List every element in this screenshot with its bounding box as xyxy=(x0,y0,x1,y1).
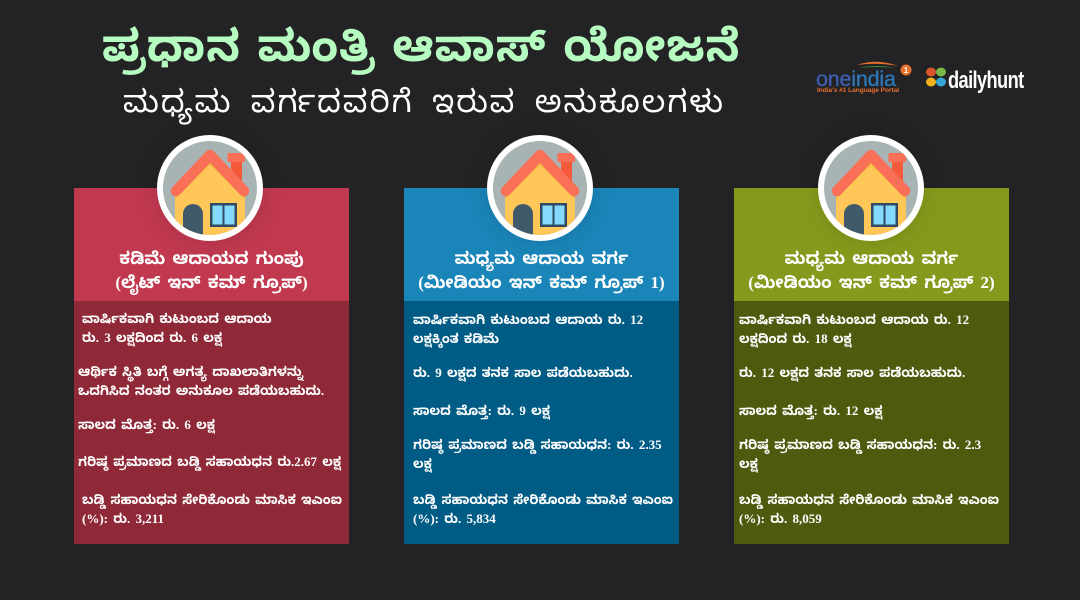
item: annual income xyxy=(413,312,643,348)
panel: middle income group 1 xyxy=(404,188,679,544)
heading: mig 1 xyxy=(418,249,665,294)
icon: house 3 xyxy=(818,135,924,242)
heading: mig 2: ಮಧ್ಯಮ ಆದಾಯ ವರ್ಗ xyxy=(785,249,958,268)
item: subsidy: ಗರಿಷ್ಠ ಪ್ರಮಾಣದ ಬಡ್ಡಿ ಸಹಾಯಧನ ರು.2.67 ಲಕ್ಷ xyxy=(78,454,341,469)
item: annual income: ವಾರ್ಷಿಕವಾಗಿ ಕುಟುಂಬದ ಆದಾಯ ರು. 12 xyxy=(413,312,643,327)
title: ಪ್ರಧಾನ ಮಂತ್ರಿ ಆವಾಸ್ ಯೋಜನೆ xyxy=(102,22,741,71)
item: monthly emi: ಬಡ್ಡಿ ಸಹಾಯಧನ ಸೇರಿಕೊಂಡು ಮಾಸಿಕ ಇಎಂಐ xyxy=(739,492,999,507)
heading: low income group xyxy=(115,249,308,295)
item: annual income: ಲಕ್ಷಕ್ಕಿಂತ ಕಡಿಮೆ xyxy=(413,331,499,346)
logo: oneindia: India's #1 Language Portal xyxy=(817,87,899,94)
item: annual income: ಲಕ್ಷದಿಂದ ರು. 18 ಲಕ್ಷ xyxy=(739,331,852,346)
logo: oneindia: 1 xyxy=(904,66,909,75)
item: monthly emi: (%): ರು. 3,211 xyxy=(82,511,164,526)
item: annual income xyxy=(82,311,272,347)
logo: oneindia: oneindia xyxy=(816,67,896,91)
panel body: low income xyxy=(74,301,349,544)
item: monthly emi: (%): ರು. 8,059 xyxy=(739,511,822,526)
item: loan amount: ಸಾಲದ ಮೊತ್ತ: ರು. 6 ಲಕ್ಷ xyxy=(78,417,215,432)
item: loan limit: ರು. 12 ಲಕ್ಷದ ತನಕ ಸಾಲ ಪಡೆಯಬಹುದು. xyxy=(739,365,965,380)
item: subsidy: ಗರಿಷ್ಠ ಪ್ರಮಾಣದ ಬಡ್ಡಿ ಸಹಾಯಧನ: ರು. 2.35 xyxy=(413,437,662,452)
item: subsidy: ಲಕ್ಷ xyxy=(413,456,432,471)
item: subsidy: ಲಕ್ಷ xyxy=(739,456,758,471)
panel header: mig 1 xyxy=(404,188,679,301)
panel body: mig 2 xyxy=(734,301,1009,544)
item: loan amount: ಸಾಲದ ಮೊತ್ತ: ರು. 9 ಲಕ್ಷ xyxy=(413,403,550,418)
panel header: low income xyxy=(74,188,349,301)
panel header: mig 2 xyxy=(734,188,1009,301)
heading: low income group: ಕಡಿಮೆ ಆದಾಯದ ಗುಂಪು xyxy=(119,249,304,268)
heading: mig 2: (ಮೀಡಿಯಂ ಇನ್ ಕಮ್ ಗ್ರೂಪ್ 2) xyxy=(748,273,995,292)
item: subsidy: ಗರಿಷ್ಠ ಪ್ರಮಾಣದ ಬಡ್ಡಿ ಸಹಾಯಧನ: ರು. 2.3 xyxy=(739,437,981,452)
item: monthly emi: (%): ರು. 5,834 xyxy=(413,511,496,526)
item: monthly emi xyxy=(82,492,342,526)
subtitle: ಮಧ್ಯಮ ವರ್ಗದವರಿಗೆ ಇರುವ ಅನುಕೂಲಗಳು xyxy=(123,84,725,119)
item: documents: ಆರ್ಥಿಕ ಸ್ಥಿತಿ ಬಗ್ಗೆ ಅಗತ್ಯ ದಾಖಲಾತಿಗಳನ್ನು xyxy=(78,364,303,379)
icon: house 1 xyxy=(154,135,266,244)
item: documents: ಒದಗಿಸಿದ ನಂತರ ಅನುಕೂಲ ಪಡೆಯಬಹುದು. xyxy=(78,383,324,398)
item: monthly emi: ಬಡ್ಡಿ ಸಹಾಯಧನ ಸೇರಿಕೊಂಡು ಮಾಸಿಕ ಇಎಂಐ xyxy=(413,492,673,507)
logo: dailyhunt: dailyhunt xyxy=(948,67,1024,94)
item: annual income: ವಾರ್ಷಿಕವಾಗಿ ಕುಟುಂಬದ ಆದಾಯ xyxy=(82,311,272,326)
panel body: mig 1 xyxy=(404,301,679,544)
heading: mig 1: (ಮೀಡಿಯಂ ಇನ್ ಕಮ್ ಗ್ರೂಪ್ 1) xyxy=(418,273,665,292)
icon: house 2 xyxy=(484,135,596,244)
panel: middle income group 2 xyxy=(734,188,1009,544)
heading: low income group: (ಲೈಟ್ ಇನ್ ಕಮ್ ಗ್ರೂಪ್) xyxy=(115,273,308,292)
item: monthly emi xyxy=(739,492,999,526)
heading: mig 2 xyxy=(748,249,995,294)
item: subsidy xyxy=(739,437,981,473)
item: subsidy xyxy=(413,437,662,473)
item: loan amount: ಸಾಲದ ಮೊತ್ತ: ರು. 12 ಲಕ್ಷ xyxy=(739,403,882,418)
logo: oneindia xyxy=(816,62,912,94)
item: annual income: ರು. 3 ಲಕ್ಷದಿಂದ ರು. 6 ಲಕ್ಷ xyxy=(82,330,222,345)
item: monthly emi xyxy=(413,492,673,526)
item: annual income xyxy=(739,312,969,348)
item: monthly emi: ಬಡ್ಡಿ ಸಹಾಯಧನ ಸೇರಿಕೊಂಡು ಮಾಸಿಕ ಇಎಂಐ xyxy=(82,492,342,507)
panel: low income group xyxy=(74,188,349,544)
item: loan limit: ರು. 9 ಲಕ್ಷದ ತನಕ ಸಾಲ ಪಡೆಯಬಹುದು. xyxy=(413,365,633,380)
heading: mig 1: ಮಧ್ಯಮ ಆದಾಯ ವರ್ಗ xyxy=(455,249,628,268)
item: annual income: ವಾರ್ಷಿಕವಾಗಿ ಕುಟುಂಬದ ಆದಾಯ ರು. 12 xyxy=(739,312,969,327)
item: documents xyxy=(78,364,324,398)
